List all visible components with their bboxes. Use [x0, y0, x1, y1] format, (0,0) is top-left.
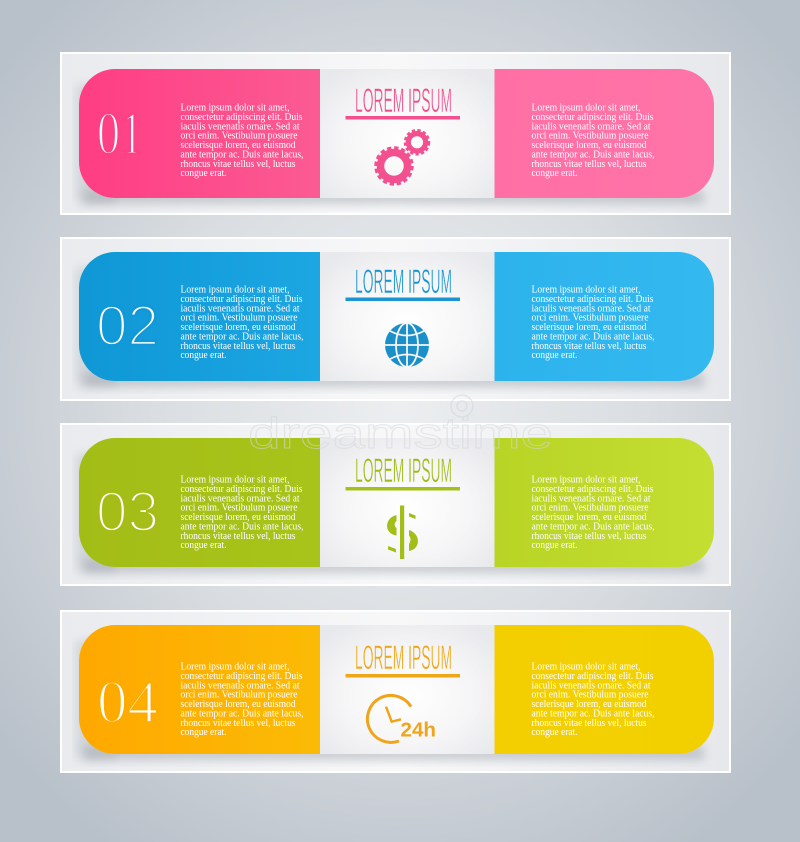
center card — [320, 69, 494, 198]
number 04: 04 — [97, 669, 158, 735]
right text block: congue erat. — [532, 168, 578, 179]
right pink segment — [494, 69, 714, 198]
left text block: rhoncus vitae tellus vel, luctus — [180, 718, 296, 729]
right text block: consectetur adipiscing elit. Duis — [532, 112, 654, 123]
right text block — [532, 103, 654, 179]
number 03: 03 — [96, 480, 159, 544]
left green segment — [79, 438, 320, 567]
right text block: ante tempor ac. Duis ante lacus, — [532, 149, 654, 160]
panel: row 02 — [61, 238, 730, 400]
watermark — [248, 395, 553, 458]
right text block: scelerisque lorem, eu euismod — [532, 512, 646, 523]
icon: gears — [376, 131, 428, 184]
left text block: congue erat. — [180, 168, 226, 179]
right text block: rhoncus vitae tellus vel, luctus — [532, 531, 647, 542]
left text block: orci enim. Vestibulum posuere — [180, 313, 298, 324]
center card — [320, 252, 494, 381]
right text block: rhoncus vitae tellus vel, luctus — [532, 718, 647, 729]
right text block: iaculis venenatis ornare. Sed at — [532, 121, 651, 132]
left text block: ante tempor ac. Duis ante lacus, — [180, 521, 304, 532]
right text block: Lorem ipsum dolor sit amet, — [532, 662, 640, 673]
left text block: ante tempor ac. Duis ante lacus, — [180, 149, 304, 160]
left text block: iaculis venenatis ornare. Sed at — [180, 303, 300, 314]
left text block: Lorem ipsum dolor sit amet, — [180, 475, 290, 486]
right text block: ante tempor ac. Duis ante lacus, — [532, 521, 654, 532]
panel: row 04: LOREM IPSUM — [355, 639, 452, 677]
right text block: consectetur adipiscing elit. Duis — [532, 294, 654, 305]
left text block: rhoncus vitae tellus vel, luctus — [180, 341, 296, 352]
right text block: iaculis venenatis ornare. Sed at — [532, 493, 651, 504]
left text block: consectetur adipiscing elit. Duis — [180, 112, 303, 123]
left text block: iaculis venenatis ornare. Sed at — [180, 680, 300, 691]
right text block: Lorem ipsum dolor sit amet, — [532, 285, 640, 296]
left text block: Lorem ipsum dolor sit amet, — [180, 103, 290, 114]
right text block: rhoncus vitae tellus vel, luctus — [532, 159, 647, 170]
left pink segment — [79, 69, 320, 198]
left text block: congue erat. — [180, 540, 226, 551]
right text block — [532, 285, 654, 361]
right text block: Lorem ipsum dolor sit amet, — [532, 103, 640, 114]
left text block: orci enim. Vestibulum posuere — [180, 690, 298, 701]
right text block: congue erat. — [532, 540, 578, 551]
heading underline — [346, 487, 460, 490]
icon: 24h clock — [367, 695, 436, 742]
heading underline — [346, 298, 460, 301]
right text block: orci enim. Vestibulum posuere — [532, 313, 649, 324]
right text block: ante tempor ac. Duis ante lacus, — [532, 708, 654, 719]
watermark: dreamstime — [248, 409, 553, 458]
number 02: 02 — [96, 294, 159, 358]
heading underline — [346, 116, 460, 120]
left blue segment — [79, 252, 320, 381]
panel: row 01: LOREM IPSUM — [355, 82, 452, 120]
right text block: consectetur adipiscing elit. Duis — [532, 484, 654, 495]
left text block: ante tempor ac. Duis ante lacus, — [180, 331, 304, 342]
left text block — [180, 475, 304, 551]
right text block: iaculis venenatis ornare. Sed at — [532, 303, 651, 314]
left text block: consectetur adipiscing elit. Duis — [180, 294, 303, 305]
panel: row 02: LOREM IPSUM — [355, 263, 452, 301]
left text block: congue erat. — [180, 727, 226, 738]
center card — [320, 438, 494, 567]
left text block: consectetur adipiscing elit. Duis — [180, 484, 303, 495]
left text block: orci enim. Vestibulum posuere — [180, 503, 298, 514]
left text block: ante tempor ac. Duis ante lacus, — [180, 708, 304, 719]
left text block: Lorem ipsum dolor sit amet, — [180, 285, 290, 296]
right text block: iaculis venenatis ornare. Sed at — [532, 680, 651, 691]
left text block — [180, 662, 304, 738]
left text block: scelerisque lorem, eu euismod — [180, 322, 296, 333]
left text block: consectetur adipiscing elit. Duis — [180, 671, 303, 682]
panel: row 03: LOREM IPSUM — [355, 452, 452, 490]
right text block: congue erat. — [532, 727, 578, 738]
right text block — [532, 662, 654, 738]
left text block: scelerisque lorem, eu euismod — [180, 699, 296, 710]
right green segment — [494, 438, 714, 567]
panel: row 01 — [61, 53, 730, 214]
right text block: consectetur adipiscing elit. Duis — [532, 671, 654, 682]
right text block: orci enim. Vestibulum posuere — [532, 503, 649, 514]
icon: globe — [385, 323, 429, 367]
left text block: rhoncus vitae tellus vel, luctus — [180, 159, 296, 170]
right text block: scelerisque lorem, eu euismod — [532, 322, 646, 333]
center card — [320, 625, 494, 754]
right text block: scelerisque lorem, eu euismod — [532, 140, 646, 151]
right text block: orci enim. Vestibulum posuere — [532, 131, 649, 142]
right text block: rhoncus vitae tellus vel, luctus — [532, 341, 647, 352]
left text block — [180, 285, 304, 361]
heading underline — [346, 674, 460, 678]
left text block: scelerisque lorem, eu euismod — [180, 512, 296, 523]
number 01: 01 — [97, 100, 143, 166]
left text block — [180, 103, 304, 179]
right yellow segment — [494, 625, 714, 754]
left orange segment — [79, 625, 320, 754]
right text block: scelerisque lorem, eu euismod — [532, 699, 646, 710]
right blue segment — [494, 252, 714, 381]
right text block: orci enim. Vestibulum posuere — [532, 690, 649, 701]
icon: dollar sign — [387, 506, 418, 559]
right text block — [532, 475, 654, 551]
icon: 24h clock: 24h — [400, 720, 436, 742]
left text block: orci enim. Vestibulum posuere — [180, 131, 298, 142]
right text block: Lorem ipsum dolor sit amet, — [532, 475, 640, 486]
right text block: ante tempor ac. Duis ante lacus, — [532, 331, 654, 342]
left text block: iaculis venenatis ornare. Sed at — [180, 121, 300, 132]
right text block: congue erat. — [532, 350, 578, 361]
left text block: scelerisque lorem, eu euismod — [180, 140, 296, 151]
panel: row 03 — [61, 424, 730, 585]
left text block: rhoncus vitae tellus vel, luctus — [180, 531, 296, 542]
left text block: Lorem ipsum dolor sit amet, — [180, 662, 290, 673]
panel: row 04 — [61, 611, 730, 772]
left text block: iaculis venenatis ornare. Sed at — [180, 493, 300, 504]
left text block: congue erat. — [180, 350, 226, 361]
